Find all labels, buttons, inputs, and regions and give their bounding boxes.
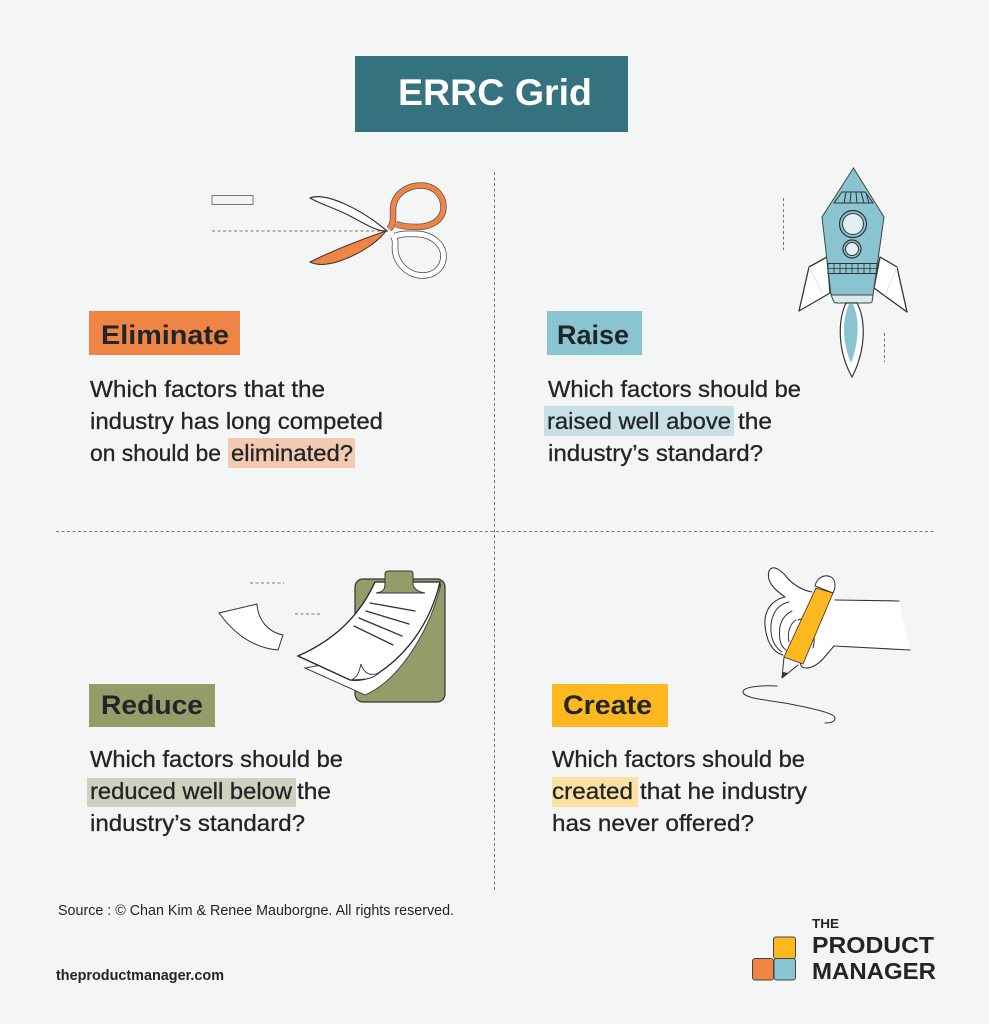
text block: create question: that he industry <box>640 778 807 804</box>
text block: reduce question <box>87 746 343 836</box>
text block: create question <box>552 746 807 836</box>
heading: Reduce: Reduce <box>101 690 203 720</box>
text block: eliminate question: industry has long competed <box>90 408 383 434</box>
logo: MANAGER <box>812 958 936 984</box>
heading: Raise: Raise <box>557 320 629 350</box>
heading: Create: Create <box>563 690 652 720</box>
panel: eliminate <box>89 186 444 468</box>
heading: Create <box>552 684 668 727</box>
text block: create question: Which factors should be <box>552 746 805 772</box>
text block: reduce question: Which factors should be <box>90 746 343 772</box>
heading: Raise <box>547 311 642 355</box>
text block: raise question <box>544 376 801 466</box>
heading: Reduce <box>89 684 215 727</box>
heading: Eliminate <box>89 311 240 355</box>
panel: reduce <box>87 571 445 836</box>
website url: theproductmanager.com <box>56 968 224 984</box>
icon: clipboard with papers <box>219 571 445 702</box>
heading: Eliminate: Eliminate <box>101 320 229 350</box>
text block: eliminate question: eliminated? <box>231 440 353 466</box>
text block: raise question: industry’s standard? <box>548 440 763 466</box>
logo: PRODUCT <box>812 932 934 958</box>
text block: create question: has never offered? <box>552 810 754 836</box>
panel: create <box>552 568 910 836</box>
text block: reduce question: industry’s standard? <box>90 810 305 836</box>
logo: THE <box>812 916 839 931</box>
text block: eliminate question <box>90 376 383 468</box>
text block: create question: created <box>552 778 633 804</box>
logo <box>752 916 936 984</box>
text block: raise question: Which factors should be <box>548 376 801 402</box>
text block: eliminate question: on should be <box>90 440 221 466</box>
text block: eliminate question: Which factors that the <box>90 376 325 402</box>
panel: raise <box>544 168 907 466</box>
text block: reduce question: reduced well below <box>90 778 293 804</box>
text block: reduce question: the <box>297 778 331 804</box>
text block: raise question: the <box>738 408 772 434</box>
text block: raise question: raised well above <box>547 408 731 434</box>
title: ERRC Grid <box>398 72 592 113</box>
icon: rocket <box>784 168 907 377</box>
icon: hand with pencil <box>743 568 910 723</box>
title <box>355 56 628 132</box>
source note: Source : © Chan Kim & Renee Mauborgne. All rights reserved. <box>58 903 454 919</box>
icon: scissors <box>212 186 444 276</box>
